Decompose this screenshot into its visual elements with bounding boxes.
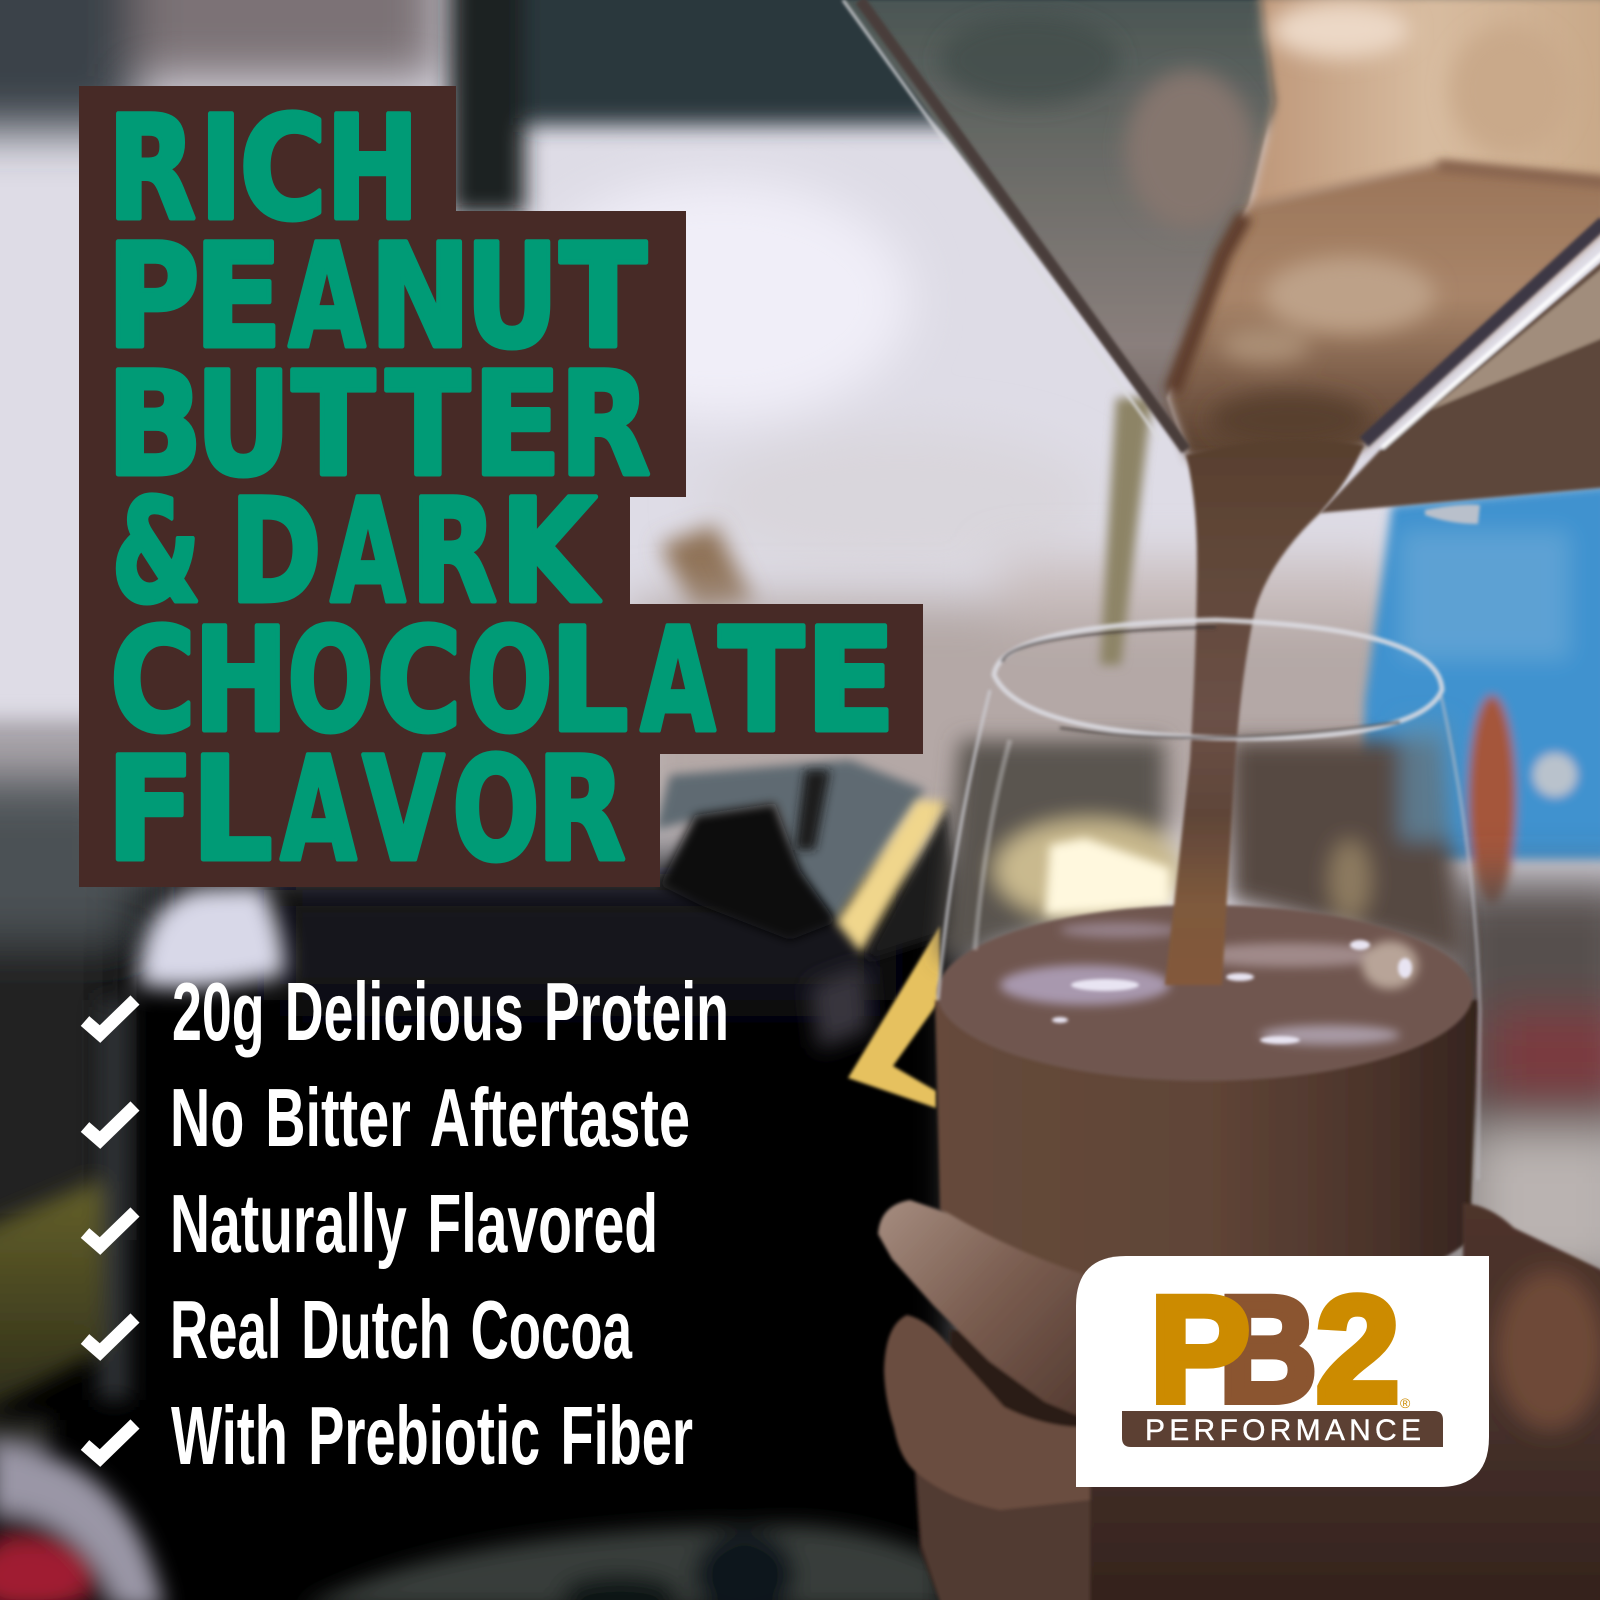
logo wordmark — [1150, 1265, 1399, 1433]
headline text: A — [280, 726, 356, 893]
blender base and reflections — [655, 760, 960, 1108]
headline text: & — [111, 468, 236, 635]
headline text: B — [106, 341, 203, 508]
logo wordmark: P — [1150, 1265, 1250, 1433]
registered mark: ® — [1400, 1395, 1411, 1411]
performance bar: PERFORMANCE — [1145, 1414, 1421, 1447]
headline text: O — [466, 597, 553, 764]
headline text: D — [230, 468, 322, 635]
headline text: K — [500, 468, 601, 635]
headline text: T — [292, 341, 375, 508]
headline text — [106, 85, 896, 893]
benefit labels: 20g Delicious Protein — [172, 965, 729, 1058]
headline panel — [79, 85, 923, 893]
headline text: P — [106, 213, 200, 380]
benefit labels: Naturally Flavored — [170, 1177, 658, 1270]
headline text: R — [411, 468, 497, 635]
headline text: U — [465, 213, 559, 380]
headline text: N — [370, 213, 471, 380]
blender jug pouring — [843, 0, 1600, 524]
headline text: H — [194, 597, 288, 764]
headline text: A — [330, 468, 405, 635]
hand holding glass — [878, 1200, 1600, 1600]
headline text: T — [719, 597, 804, 764]
headline text: L — [191, 726, 273, 893]
headline text: T — [386, 341, 470, 508]
headline text: E — [194, 213, 283, 380]
headline text: H — [326, 85, 419, 252]
smoothie body — [935, 1000, 1478, 1300]
headline text: A — [288, 213, 365, 380]
headline text: T — [560, 213, 647, 380]
smoothie surface — [937, 905, 1473, 1081]
check icons — [85, 1000, 135, 1458]
benefit labels: Real Dutch Cocoa — [170, 1283, 633, 1376]
headline text: F — [106, 726, 195, 893]
headline text: O — [287, 597, 374, 764]
headline text: R — [560, 341, 650, 508]
headline text: U — [196, 341, 291, 508]
benefits checklist — [85, 965, 729, 1482]
headline text: R — [537, 726, 626, 893]
headline text: L — [550, 597, 629, 764]
headline text: O — [452, 726, 540, 893]
drinking glass with smoothie — [935, 439, 1480, 1300]
benefit labels: No Bitter Aftertaste — [170, 1071, 690, 1164]
benefit labels: With Prebiotic Fiber — [171, 1389, 693, 1482]
headline text: C — [377, 597, 462, 764]
headline text: I — [199, 85, 243, 252]
headline text: V — [362, 726, 444, 893]
PB2 Performance logo badge — [1076, 1256, 1489, 1487]
chocolate stream — [1165, 439, 1364, 985]
glass rim and walls — [938, 620, 1480, 1180]
headline text: C — [239, 85, 327, 252]
logo wordmark: 2 — [1316, 1265, 1399, 1433]
headline text: C — [110, 597, 196, 764]
logo wordmark: B — [1219, 1265, 1317, 1433]
headline text: A — [640, 597, 715, 764]
headline text: E — [805, 597, 896, 764]
headline text: R — [108, 85, 196, 252]
headline text: E — [472, 341, 562, 508]
benefit labels — [170, 965, 729, 1482]
